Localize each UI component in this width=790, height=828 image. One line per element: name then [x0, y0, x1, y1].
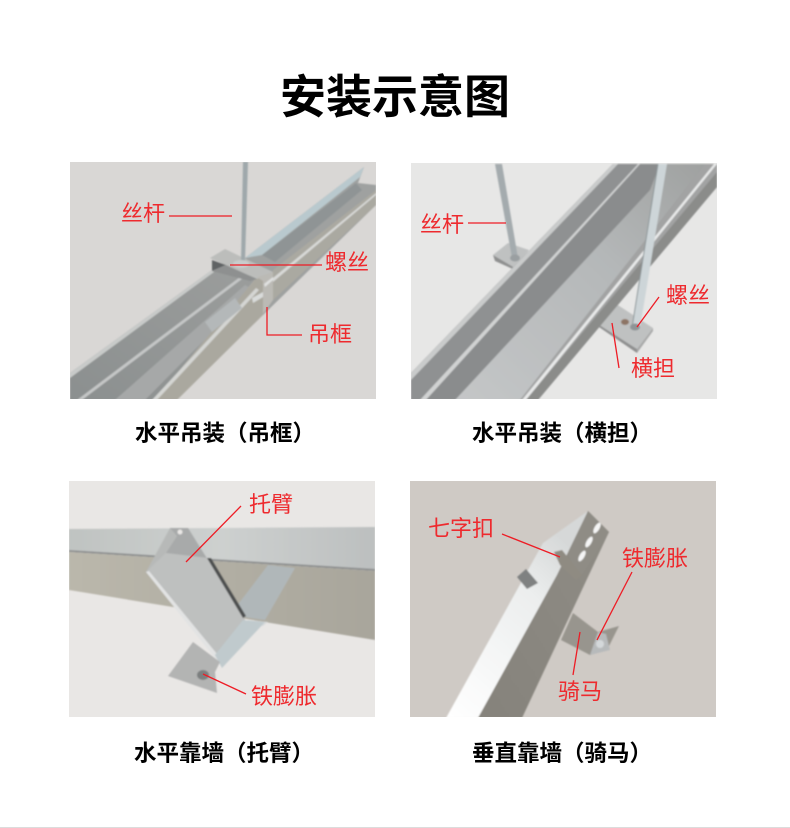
label: hanger frame: 吊框	[308, 322, 352, 347]
label: screw	[637, 283, 710, 327]
photo: tray with crossbar	[411, 163, 717, 400]
label: threaded rod: 丝杆	[121, 201, 165, 226]
caption: horizontal hanging crossbar: 水平吊装（横担）	[472, 421, 652, 446]
photo: vertical tray with saddle bracket	[410, 481, 716, 718]
label: threaded rod	[121, 201, 232, 226]
label: L-shaped clip: 七字扣	[428, 516, 494, 541]
label: iron expansion bolt	[597, 546, 688, 640]
label: crossbar: 横担	[631, 356, 675, 381]
label: crossbar	[612, 323, 675, 381]
photo: tray with support arm	[69, 481, 375, 717]
label: support arm: 托臂	[249, 492, 293, 517]
panel: vertical wall mount with saddle bracket	[410, 481, 716, 718]
label: screw: 螺丝	[666, 283, 710, 308]
label: L-shaped clip	[428, 516, 560, 557]
caption: horizontal wall mount: 水平靠墙（托臂）	[134, 741, 314, 766]
label: threaded rod	[420, 212, 506, 237]
caption: vertical wall mount: 垂直靠墙（骑马）	[472, 741, 652, 766]
label: saddle bracket	[558, 632, 602, 704]
label: iron expansion bolt: 铁膨胀	[622, 546, 688, 571]
label: saddle bracket: 骑马	[558, 679, 602, 704]
label: screw	[230, 250, 369, 275]
label: support arm	[186, 492, 293, 562]
panel: horizontal hanging with hanger frame	[70, 162, 376, 400]
panel: horizontal hanging with crossbar	[411, 163, 717, 400]
label: iron expansion bolt: 铁膨胀	[251, 684, 317, 709]
label: threaded rod: 丝杆	[420, 212, 464, 237]
label: iron expansion bolt	[203, 674, 317, 709]
photo: tray with hanger frame	[70, 162, 376, 400]
label: screw: 螺丝	[325, 250, 369, 275]
caption: horizontal hanging frame: 水平吊装（吊框）	[135, 421, 315, 446]
label: hanger frame	[267, 307, 352, 347]
panel: horizontal wall mount with support arm	[69, 481, 375, 717]
title: 安装示意图	[280, 71, 510, 123]
